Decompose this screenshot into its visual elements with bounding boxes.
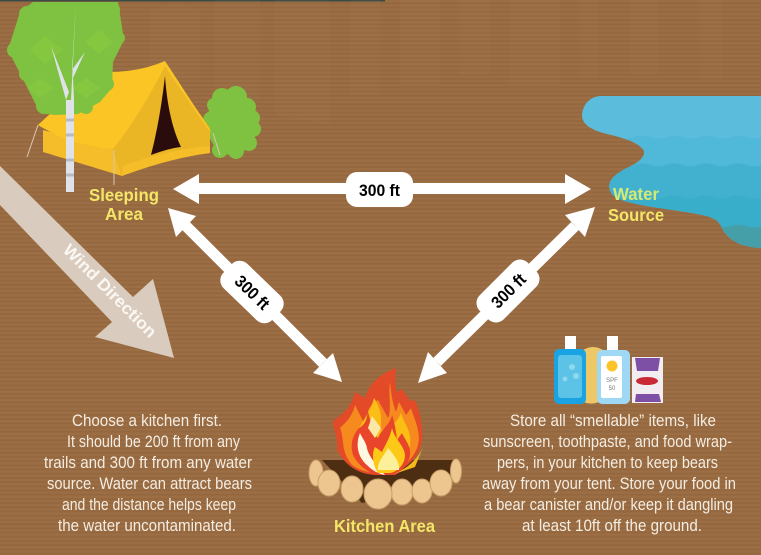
arrow: sleeping to water 300 ft xyxy=(173,172,591,207)
food wrapper xyxy=(632,357,663,403)
sponge xyxy=(583,347,603,404)
text block: store smellable items: at least 10ft off the ground. xyxy=(522,517,702,535)
label: water source xyxy=(608,184,664,225)
arrow: sleeping to water 300 ft: 300 ft xyxy=(359,181,400,200)
arrow: wind direction xyxy=(0,166,174,358)
icon: tent xyxy=(27,61,220,185)
text block: store smellable items xyxy=(482,412,736,535)
water source: lake xyxy=(582,96,761,248)
icon: smellable items xyxy=(554,336,663,404)
text block: store smellable items: away from your tent. Store your food in xyxy=(482,475,736,493)
label: water source: Source xyxy=(608,205,664,225)
arrow: sleeping to kitchen 300 ft xyxy=(168,208,342,382)
text block: choose a kitchen: It should be 200 ft from any xyxy=(67,433,241,451)
top edge bar xyxy=(0,0,385,2)
text block: store smellable items: a bear canister and/or keep it dangling xyxy=(484,496,733,514)
text block: choose a kitchen xyxy=(44,412,252,535)
text block: choose a kitchen: Choose a kitchen first. xyxy=(72,412,222,430)
birch tree trunk xyxy=(51,2,85,192)
text block: choose a kitchen: the water uncontaminated. xyxy=(58,517,236,535)
label: sleeping area xyxy=(89,185,159,224)
bush beside tent xyxy=(203,86,261,159)
label: kitchen area: Kitchen Area xyxy=(334,516,435,536)
sunscreen bottle: 50 xyxy=(609,386,616,392)
arrow: water to kitchen 300 ft xyxy=(418,207,595,383)
arrow: sleeping to kitchen 300 ft: 300 ft xyxy=(231,272,274,314)
text block: choose a kitchen: source. Water can attract bears xyxy=(47,475,252,493)
arrow: wind direction: Wind Direction xyxy=(59,240,160,342)
label: water source: Water xyxy=(613,184,659,204)
tree xyxy=(7,2,125,115)
text block: store smellable items: sunscreen, toothpaste, and food wrap- xyxy=(483,433,732,451)
label: sleeping area: Area xyxy=(105,204,143,224)
icon: campfire xyxy=(309,368,462,509)
blue bottle xyxy=(554,336,586,404)
text block: store smellable items: pers, in your kitchen to keep bears xyxy=(497,454,718,472)
label: sleeping area: Sleeping xyxy=(89,185,159,205)
text block: choose a kitchen: trails and 300 ft from any water xyxy=(44,454,252,472)
logs xyxy=(309,459,462,509)
faint forest silhouettes xyxy=(150,0,722,125)
sunscreen bottle: SPF xyxy=(606,378,618,384)
sunscreen bottle xyxy=(597,336,630,404)
text block: choose a kitchen: and the distance helps keep xyxy=(62,496,236,514)
arrow: water to kitchen 300 ft: 300 ft xyxy=(487,270,530,312)
text block: store smellable items: Store all “smellable” items, like xyxy=(510,412,716,430)
flames xyxy=(333,368,422,475)
